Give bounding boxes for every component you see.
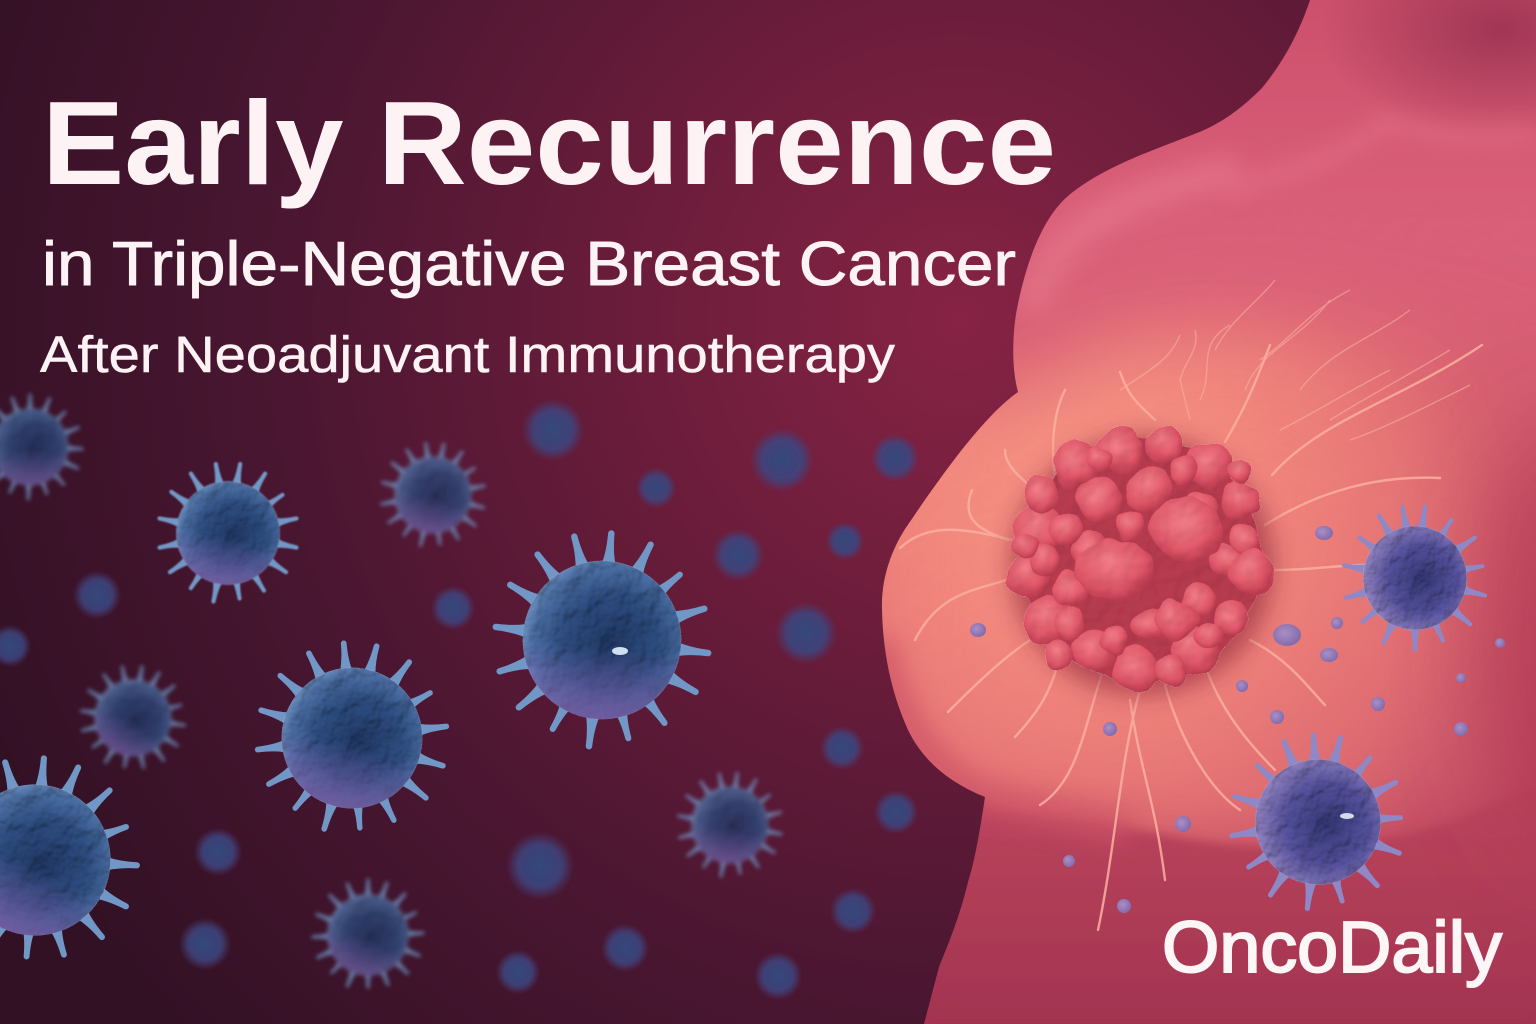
logo: OncoDaily: OncoDaily — [1162, 908, 1502, 988]
torso figure — [860, 0, 1536, 1024]
tumor shadow — [1010, 435, 1274, 695]
cell glint — [1340, 813, 1354, 819]
immune cells: background field — [0, 393, 919, 1008]
lower-left breast rim shade — [880, 640, 1130, 828]
cell: large centre — [482, 521, 722, 760]
skin wrinkles — [1120, 280, 1470, 440]
lower torso shadow — [972, 804, 1483, 903]
cell: purple lower — [1208, 712, 1428, 932]
veins — [900, 345, 1482, 930]
collarbone highlight — [1343, 118, 1520, 148]
title: Early Recurrence — [42, 77, 1056, 210]
tumor lobes — [1006, 425, 1274, 693]
cell: upper left — [144, 449, 312, 617]
cell: centre left — [232, 618, 472, 858]
cell: purple right — [1331, 494, 1499, 662]
mid-distance cells — [0, 393, 791, 1008]
breast shape — [860, 328, 1536, 845]
shoulder highlight — [1030, 170, 1240, 310]
cell: bottom left edge — [0, 720, 175, 1000]
cell glint — [612, 647, 628, 655]
neck shading — [1352, 0, 1536, 122]
right side shadow — [1480, 420, 1536, 860]
tumor — [1006, 425, 1274, 695]
tagline: After Neoadjuvant Immunotherapy — [40, 326, 896, 383]
purple dots — [970, 526, 1505, 913]
skin texture — [880, 200, 1536, 900]
torso base — [880, 0, 1536, 1024]
blurred small cells — [0, 399, 919, 1000]
subtitle: in Triple-Negative Breast Cancer — [42, 230, 1016, 299]
